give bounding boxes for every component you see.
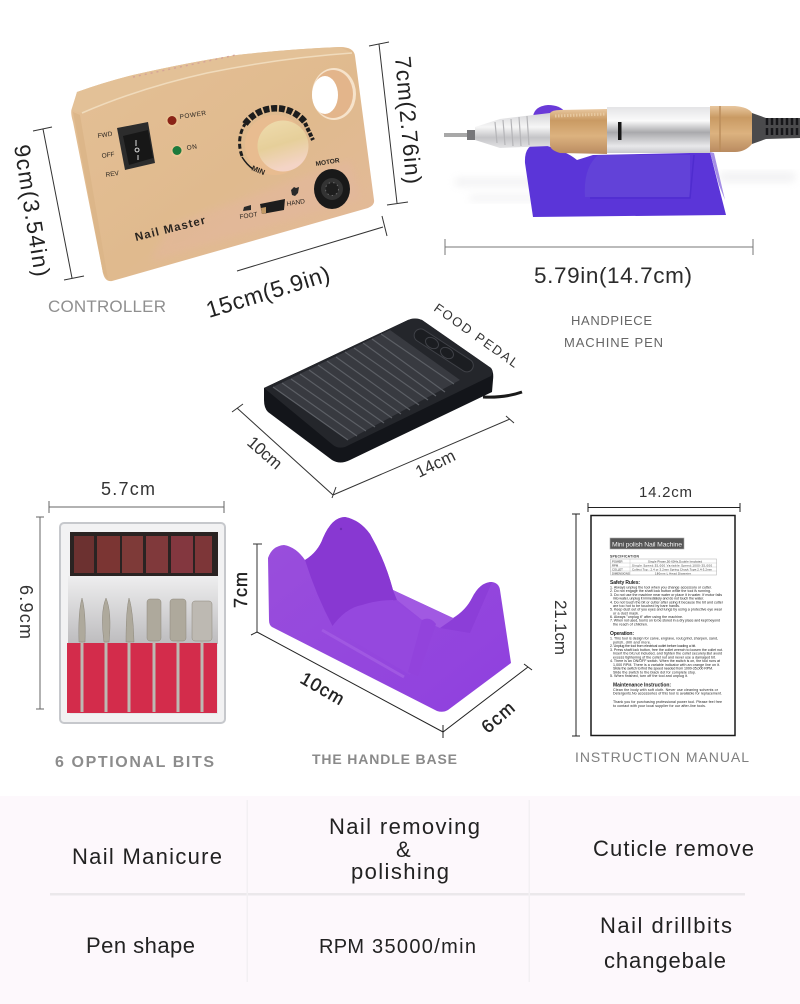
pedal body bbox=[264, 318, 493, 462]
panel printed labels: MIN bbox=[250, 164, 266, 177]
back wall bbox=[305, 517, 397, 627]
operation: Slide the switch to the black dot for complete stop. bbox=[613, 670, 696, 674]
maintenance: Detergents.No accessories of this tool is available for replacement. bbox=[613, 692, 722, 696]
specification table: Single Phase,50-60Hz,Double Insulated bbox=[648, 559, 702, 563]
dimension: bits height bbox=[36, 517, 44, 709]
dimension label: 9cm: 9cm(3.54in) bbox=[9, 143, 55, 278]
dimension: base length and width bbox=[251, 632, 532, 738]
safety rules: 5. Keep dust out of you eyes and lungs by using a protective eye wear bbox=[610, 608, 723, 612]
feature: nail drillbits changebale: changebale bbox=[604, 948, 726, 973]
safety rules: are too hot to be touched by bare hands. bbox=[613, 604, 680, 608]
manual title: Mini polish Nail Machine bbox=[612, 542, 682, 548]
label: handpiece: HANDPIECE bbox=[571, 313, 652, 328]
dimension label: 10cm: 10cm bbox=[243, 433, 286, 473]
pen stand bbox=[525, 105, 726, 217]
dimension label: 7cm: 7cm(2.76in) bbox=[390, 55, 426, 185]
specification table: Single Speed:35,000 Variable Speed:1000-35,000 bbox=[632, 563, 712, 567]
specification table: 180mm L Head Diameter bbox=[655, 571, 691, 575]
foot hand slider bbox=[243, 187, 299, 214]
dimension label: 6.9cm: 6.9cm bbox=[16, 585, 36, 639]
dimension label: handpiece: 5.79in(14.7cm) bbox=[534, 263, 692, 288]
safety rules: into water, unplug it immediately and do not touch the water. bbox=[613, 597, 704, 601]
specification table bbox=[610, 554, 717, 575]
feature: cuticle remove: Cuticle remove bbox=[593, 836, 754, 861]
panel printed labels: MOTOR bbox=[315, 157, 340, 168]
safety rules: 1. Always unplug the tool when you change accessory or cutter. bbox=[610, 586, 712, 590]
dimension label: 14.2cm: 14.2cm bbox=[639, 484, 692, 501]
panel: handpiece bbox=[444, 105, 800, 217]
panel printed labels: ON bbox=[186, 143, 198, 152]
dimension: controller height bbox=[33, 127, 84, 280]
grey tray bbox=[68, 576, 218, 644]
dimension: handpiece length bbox=[445, 239, 753, 255]
front post bbox=[408, 619, 436, 676]
operation: polish, drill and more. bbox=[613, 640, 651, 644]
maintenance: Clean the body with soft cloth. Never use cleaning solvents or bbox=[613, 688, 719, 692]
pen gold grip bbox=[550, 109, 607, 154]
dimension label: base 10cm: 10cm bbox=[297, 668, 348, 709]
operation: 5. When finished, turn off the tool and unplug it. bbox=[610, 674, 688, 678]
speed knob bbox=[245, 115, 308, 175]
specification table: POWER bbox=[612, 559, 623, 563]
dimension: controller depth bbox=[369, 42, 408, 205]
pen silver body bbox=[607, 107, 710, 153]
label: controller: CONTROLLER bbox=[48, 297, 166, 316]
panel printed labels bbox=[97, 110, 340, 244]
specification table: DIMENSIONS bbox=[612, 571, 630, 575]
feature: nail drillbits changebale bbox=[600, 913, 732, 973]
label: machine pen: MACHINE PEN bbox=[564, 335, 663, 350]
maintenance bbox=[613, 682, 722, 708]
dimension: base height bbox=[253, 544, 262, 632]
table grid lines bbox=[50, 800, 745, 982]
safety rules: Safety Rules: bbox=[610, 580, 640, 586]
feature: nail removing and polishing: & bbox=[396, 837, 411, 862]
dimension label: 5.7cm: 5.7cm bbox=[101, 479, 155, 499]
feature: rpm: RPM bbox=[319, 936, 364, 958]
dimension: controller width bbox=[237, 216, 387, 271]
operation: Slide the switch to find the speed needed from 1000-35,000 RPM. bbox=[613, 666, 713, 670]
dimension: manual width bbox=[588, 503, 740, 512]
hanging hole bbox=[340, 528, 342, 530]
panel printed labels: REV bbox=[105, 170, 120, 179]
safety rules: 7. When not used, tool is on to be stored in a dry place and kept beyond bbox=[610, 619, 720, 623]
operation: Insert the bit,nut included, and tighten the collet securely.But avoid bbox=[613, 652, 722, 656]
pen nose bbox=[444, 113, 550, 148]
manual title bbox=[610, 538, 684, 549]
operation: 2. Unplug the tool from electrical outlet before loading a bit. bbox=[610, 644, 696, 648]
maintenance: Maintenance Instruction: bbox=[613, 682, 671, 688]
back rail bbox=[393, 590, 458, 628]
case bbox=[60, 523, 225, 723]
dimension: bits width bbox=[49, 501, 224, 513]
panel printed labels: FOOT bbox=[239, 211, 258, 221]
rocker switch bbox=[117, 122, 155, 170]
operation: 1. This tool is design for carve, engrave, rout,grind, sharpen, sand, bbox=[610, 636, 718, 640]
red card bbox=[67, 643, 217, 713]
operation: 3. Press shaft lock button, free the collet wrench to loosen the collet nut. bbox=[610, 648, 723, 652]
base floor bbox=[331, 600, 422, 675]
dimension: manual height bbox=[572, 514, 580, 736]
safety rules: or a dust mask. bbox=[613, 611, 639, 615]
feature: nail removing and polishing: Nail removing bbox=[329, 814, 480, 839]
hole bbox=[312, 68, 356, 120]
maintenance: Thank you for purchasing professional power tool. Please feel free bbox=[613, 700, 722, 704]
manual page bbox=[591, 516, 735, 736]
panel: instruction manual bbox=[591, 516, 735, 736]
safety rules bbox=[610, 580, 724, 626]
label: instruction manual: INSTRUCTION MANUAL bbox=[575, 749, 749, 765]
label: handle base: THE HANDLE BASE bbox=[312, 751, 457, 767]
safety rules: the reach of children. bbox=[613, 622, 648, 626]
label: food pedal: FOOD PEDAL bbox=[431, 300, 521, 371]
safety rules: 4. Do not touch the bit or cutter after using it because the bit and cutter bbox=[610, 600, 724, 604]
specification table: Collect Typ.: 2.4 or 3.2mm Spring Chuck Type:2.4-3.2mm bbox=[632, 567, 713, 571]
feature: nail removing and polishing bbox=[329, 814, 480, 884]
sanding bands bbox=[70, 532, 218, 576]
maintenance: to contact with your local supplier for our after-line tools. bbox=[613, 704, 706, 708]
dimension label: 21.1cm: 21.1cm bbox=[551, 600, 570, 655]
panel printed labels: HAND bbox=[286, 198, 306, 208]
feature: nail removing and polishing: polishing bbox=[351, 859, 449, 884]
operation: Operation: bbox=[610, 631, 634, 637]
feature: rpm: 35000/min bbox=[372, 936, 476, 958]
pedal cable bbox=[483, 392, 522, 397]
controller body bbox=[71, 47, 374, 281]
back ear inner shade bbox=[440, 582, 492, 633]
shadow bbox=[455, 172, 795, 201]
panel printed labels: OFF bbox=[101, 151, 115, 160]
specification table: RPM bbox=[612, 563, 619, 567]
operation: 4. There is an ON/OFF switch. When the switch is on, the tool runs at bbox=[610, 659, 720, 663]
panel printed labels: FWD bbox=[97, 131, 113, 140]
indicator lights bbox=[166, 115, 183, 157]
panel: handle base bbox=[268, 517, 511, 712]
pedal ribbed tread bbox=[273, 330, 460, 440]
feature: pen shape: Pen shape bbox=[86, 933, 195, 958]
label: optional bits: 6 OPTIONAL BITS bbox=[55, 754, 214, 771]
specification table: COLLET bbox=[612, 567, 623, 571]
safety rules: 2. Do not engage the shaft lock button while the tool is running. bbox=[610, 589, 711, 593]
panel: foot pedal bbox=[264, 318, 522, 462]
dial scale bbox=[240, 108, 313, 169]
dimension label: 15cm: 15cm(5.9in) bbox=[203, 260, 333, 323]
panel: controller bbox=[71, 47, 374, 281]
table background bbox=[0, 796, 800, 1004]
safety rules: 6. Always "unplug it" after using the machine. bbox=[610, 615, 683, 619]
pedal buttons bbox=[412, 326, 476, 374]
dimension label: base 6cm: 6cm bbox=[478, 698, 519, 737]
dimension: pedal depth and width bbox=[232, 404, 514, 498]
panel: features table bbox=[0, 796, 800, 1004]
safety rules: 3. Do not use the machine near water or place it in water. If motor falls bbox=[610, 593, 722, 597]
feature: nail drillbits changebale: Nail drillbits bbox=[600, 913, 732, 938]
operation: excess tightening of the collet nut and never use a damaged bit. bbox=[613, 655, 716, 659]
panel printed labels: Nail Master bbox=[134, 215, 207, 244]
operation bbox=[610, 631, 723, 678]
panel: drill bits case bbox=[60, 523, 225, 723]
power cable bbox=[752, 113, 800, 144]
panel printed labels: POWER bbox=[179, 110, 207, 121]
specification table: SPECIFICATION bbox=[610, 554, 640, 558]
feature: rpm bbox=[319, 936, 476, 958]
top vents bbox=[133, 55, 236, 77]
pen gold end bbox=[710, 106, 752, 152]
left rail highlight bbox=[322, 630, 404, 677]
motor socket bbox=[314, 169, 350, 209]
drill bits bbox=[79, 598, 212, 712]
dimension label: 14cm: 14cm bbox=[412, 446, 459, 482]
dimension label: base 7cm: 7cm bbox=[231, 572, 251, 608]
base silhouette bbox=[268, 517, 511, 712]
feature: nail manicure: Nail Manicure bbox=[72, 844, 222, 869]
operation: 1,000 RPM. There is a variable indicator with an orange line on it. bbox=[613, 663, 720, 667]
